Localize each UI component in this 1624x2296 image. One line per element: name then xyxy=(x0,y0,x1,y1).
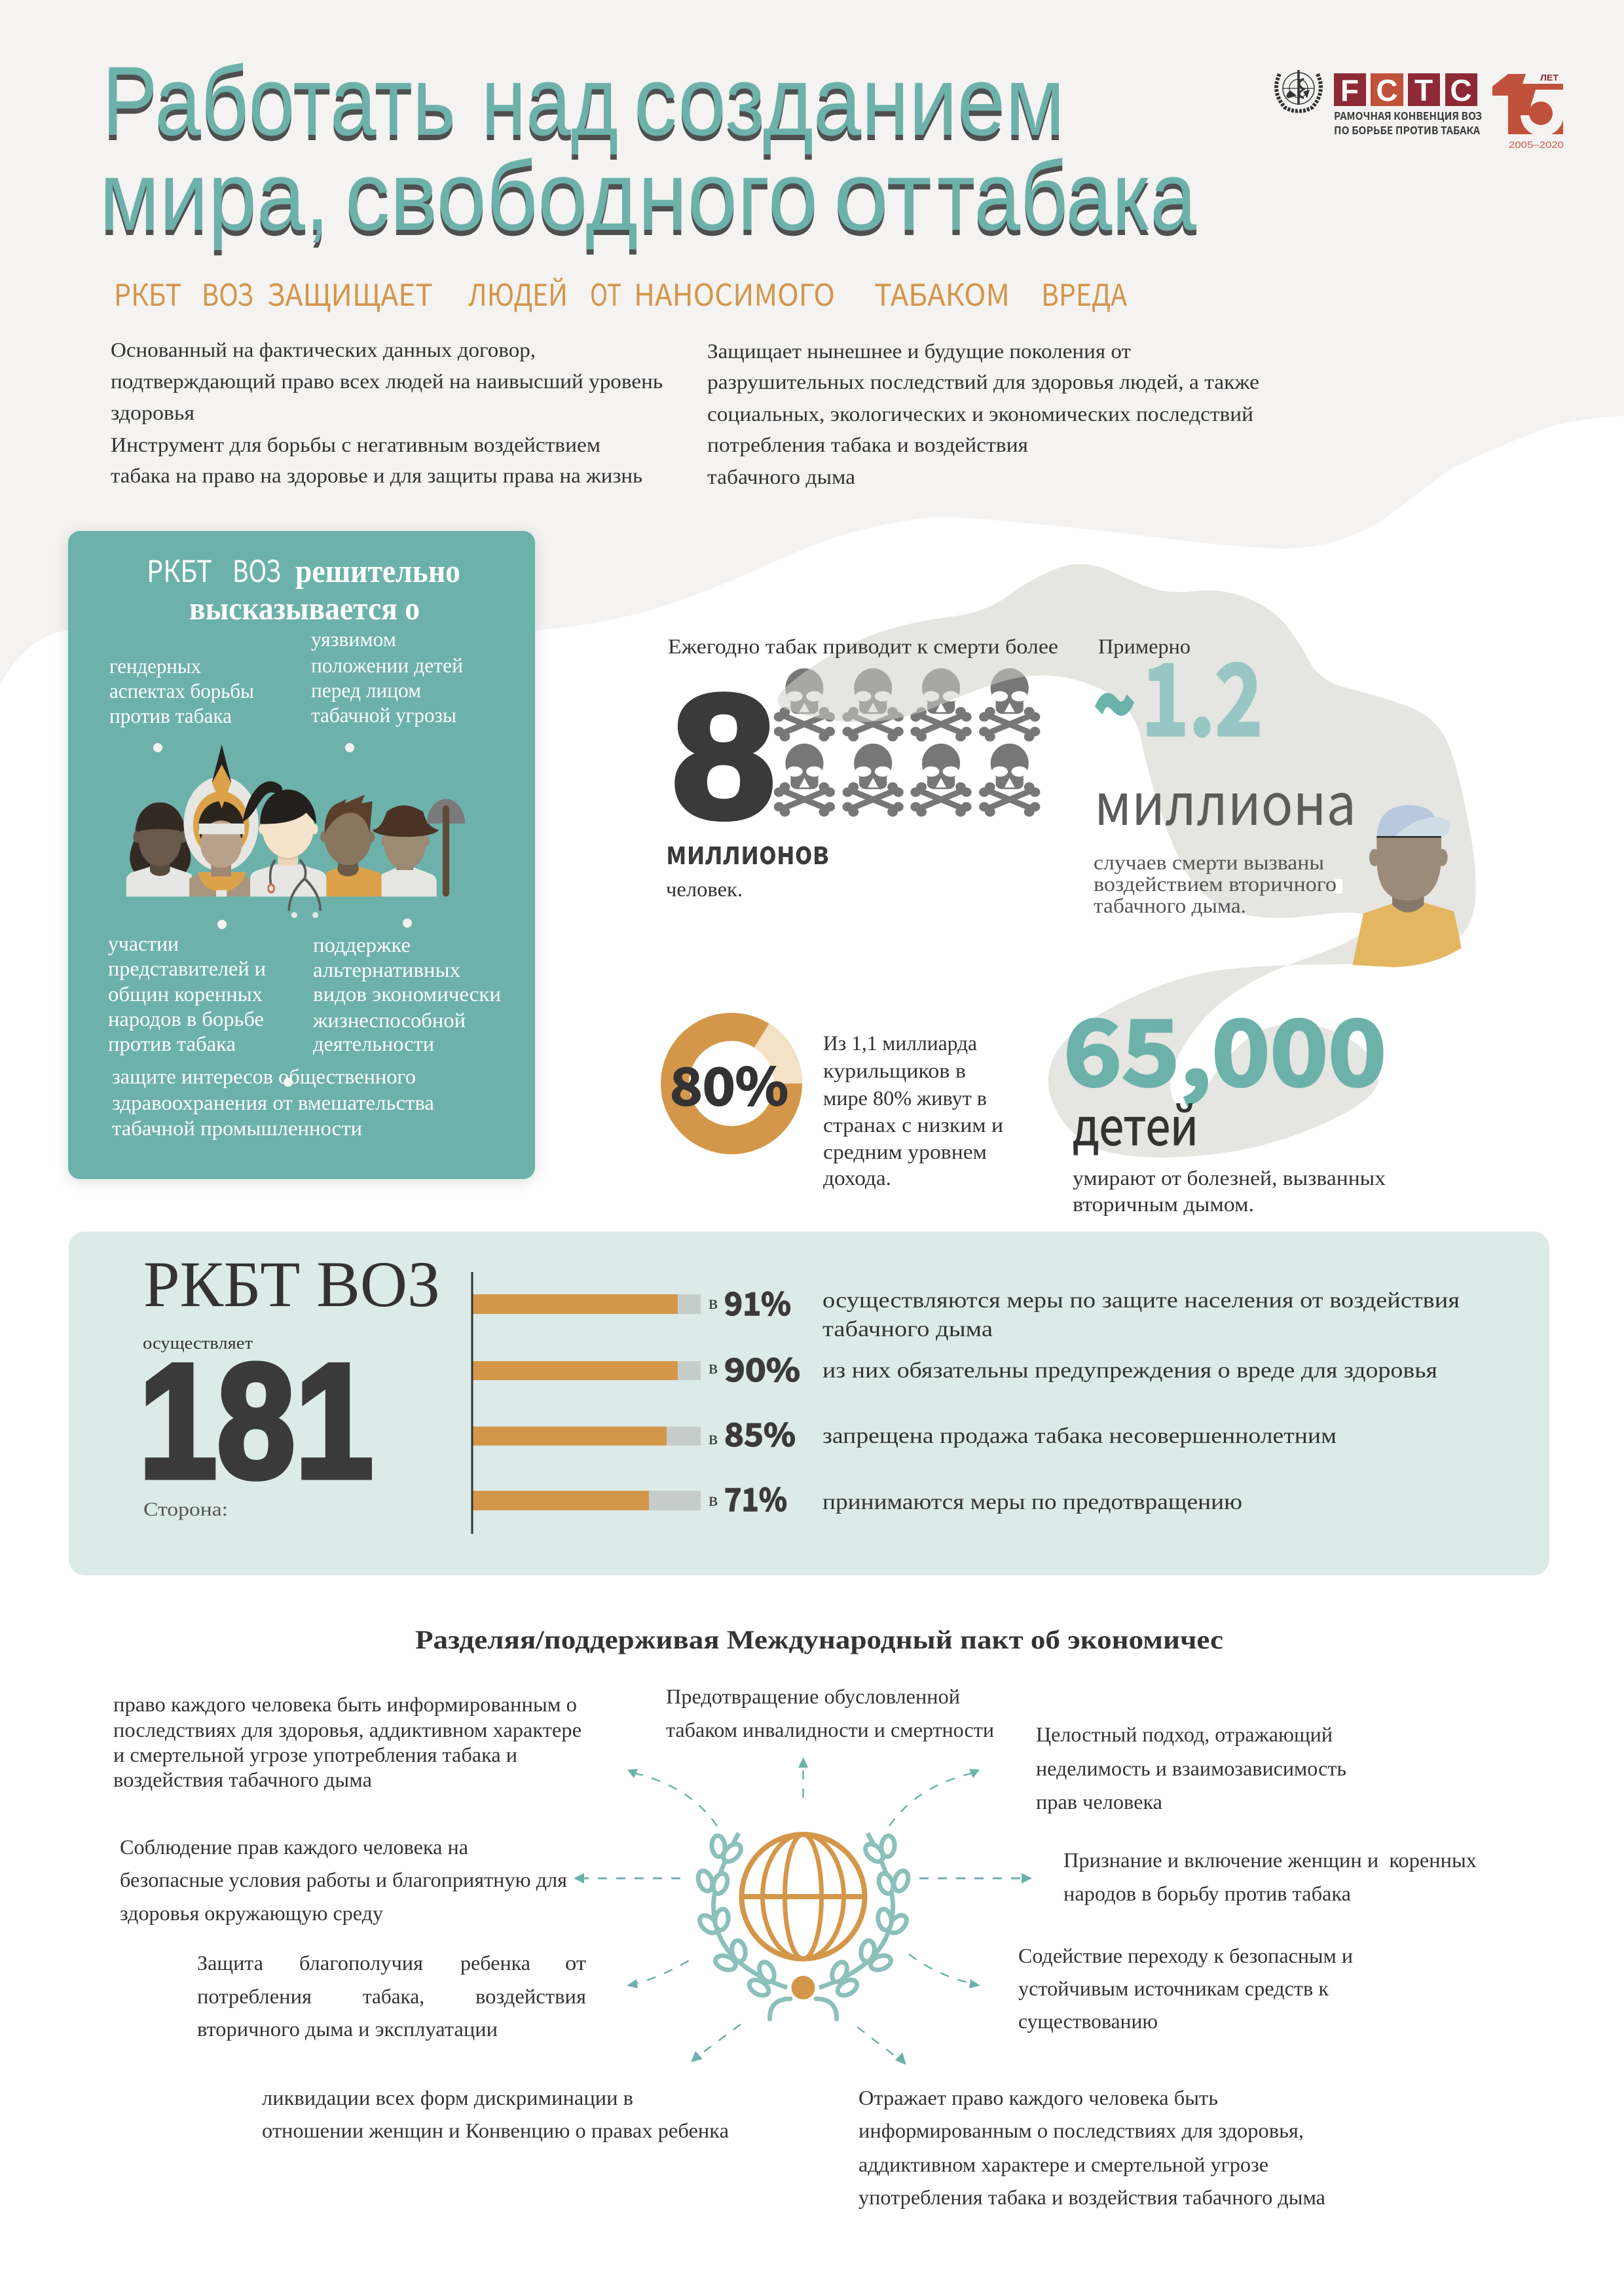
text: prevention: Предотвращение обусловленной xyxy=(666,1685,960,1708)
percent labels xyxy=(709,1279,800,1520)
percent labels: 90% xyxy=(724,1345,800,1391)
title: свободного xyxy=(345,141,818,251)
intro text: left column: Основанный на фактических данных договор, xyxy=(111,338,536,361)
stat: 65,000 children xyxy=(1063,981,1386,1216)
text: child welfare: вторичного дыма и эксплуатации xyxy=(197,2017,498,2041)
text: child welfare: табака, xyxy=(363,1984,424,2008)
intro text: right column: разрушительных последствий для здоровья людей, а также xyxy=(707,370,1259,393)
title xyxy=(100,46,1196,251)
text: alternative livelihoods: деятельности xyxy=(313,1032,434,1055)
text: indigenous participation: представителей и xyxy=(108,957,266,980)
text: safe working conditions: Соблюдение прав каждого человека на xyxy=(120,1835,468,1859)
stat: 8 million deaths: 8 xyxy=(672,658,775,854)
text: gender aspects: против табака xyxy=(109,704,232,727)
text: alternative livelihoods: альтернативных xyxy=(313,958,460,981)
text: child welfare xyxy=(197,1951,586,2041)
text: holistic approach: прав человека xyxy=(1036,1790,1162,1813)
title: над xyxy=(481,46,618,156)
globe xyxy=(741,1834,864,1959)
text: women and indigenous peoples xyxy=(1063,1848,1477,1905)
stat: 1.2 million second-hand smoke: случаев смерти вызваны xyxy=(1094,850,1324,874)
bar descriptions: принимаются меры по предотвращению xyxy=(822,1490,1242,1514)
intro text: left column: здоровья xyxy=(111,401,194,424)
panel: FCTC parties and implementation xyxy=(69,1231,1549,1575)
text: reflects right to information: Отражает право каждого человека быть xyxy=(858,2086,1218,2109)
text: holistic approach xyxy=(1036,1722,1346,1813)
doctor with stethoscope xyxy=(243,781,326,918)
text: holistic approach: неделимость и взаимозависимость xyxy=(1036,1757,1346,1780)
text: indigenous participation: участии xyxy=(108,932,179,955)
stat: 1.2 million second-hand smoke: миллиона xyxy=(1094,759,1356,842)
icon: WHO emblem xyxy=(1276,70,1321,111)
stat: 8 million deaths: миллионов xyxy=(666,828,829,873)
title: Работать xyxy=(102,46,456,156)
stat: 181 parties: 181 xyxy=(139,1330,373,1512)
text: indigenous participation: общин коренных xyxy=(108,982,263,1006)
icon: rows of skulls and crossbones xyxy=(774,668,1040,816)
text: right to be informed: право каждого человека быть информированным о xyxy=(113,1692,577,1716)
text: indigenous participation: против табака xyxy=(108,1032,236,1055)
FCTC letter boxes: T xyxy=(1414,73,1433,107)
stat: 1.2 million second-hand smoke: воздействием вторичного xyxy=(1094,872,1337,896)
intro text: right column xyxy=(707,339,1259,488)
bar descriptions xyxy=(822,1288,1460,1514)
subtitle: ЗАЩИЩАЕТ xyxy=(267,272,433,315)
text: indigenous participation: народов в борьбе xyxy=(108,1007,264,1030)
text: women and indigenous peoples: народов в борьбу против табака xyxy=(1063,1882,1351,1905)
intro text: left column xyxy=(111,338,663,487)
intro text: right column: потребления табака и воздействия xyxy=(707,433,1028,456)
anniversary number 15 xyxy=(1492,73,1568,151)
text: vulnerable children: перед лицом xyxy=(311,678,421,702)
text: reflects right to information: аддиктивном характере и смертельной угрозе xyxy=(858,2153,1268,2176)
stat: 65,000 children: умирают от болезней, вызванных xyxy=(1073,1166,1386,1190)
text: child welfare: Защита xyxy=(197,1951,263,1975)
text: reflects right to information: информированным о последствиях для здоровья, xyxy=(858,2119,1304,2142)
text: right to be informed: последствиях для здоровья, аддиктивном характере xyxy=(113,1718,581,1741)
man with spiky hair xyxy=(320,795,382,897)
subtitle: ВРЕДА xyxy=(1041,272,1127,315)
shovel xyxy=(427,799,465,897)
text: smokers in low and middle income countries: средним уровнем xyxy=(823,1140,987,1163)
FCTC letter boxes: F xyxy=(1340,73,1359,107)
text: eliminating discrimination xyxy=(262,2086,729,2142)
text: sustainable livelihoods: Содействие переходу к безопасным и xyxy=(1018,1944,1353,1967)
FCTC letter boxes: C xyxy=(1450,73,1472,107)
text: gender aspects: гендерных xyxy=(109,654,201,678)
logo caption: ПО БОРЬБЕ ПРОТИВ ТАБАКА xyxy=(1334,122,1481,137)
text: alternative livelihoods: поддержке xyxy=(313,933,411,957)
text: child welfare: ребенка xyxy=(460,1951,530,1975)
text: child welfare: благополучия xyxy=(299,1951,423,1975)
stat: 8 million deaths: Ежегодно табак приводит к смерти более xyxy=(668,634,1058,658)
subtitle: ОТ xyxy=(590,272,621,315)
panel heading xyxy=(147,548,460,627)
stat: 181 parties: Сторона: xyxy=(143,1499,228,1520)
intro text: right column: Защищает нынешнее и будущие поколения от xyxy=(707,339,1131,363)
stat: 65,000 children: детей xyxy=(1073,1087,1198,1160)
percent labels: в xyxy=(709,1427,718,1449)
bar descriptions: из них обязательны предупреждения о вреде для здоровья xyxy=(822,1358,1437,1383)
text: vulnerable children xyxy=(311,627,463,727)
stat: 1.2 million second-hand smoke: ~ xyxy=(1094,628,1135,770)
indigenous person with feather headdress xyxy=(184,744,259,897)
text: women and indigenous peoples: Признание и включение женщин и коренных xyxy=(1063,1848,1477,1872)
percent labels: 91% xyxy=(724,1279,791,1324)
text: alternative livelihoods: видов экономически xyxy=(313,982,501,1006)
percent labels: 85% xyxy=(724,1410,796,1455)
anniversary number 15: 2005–2020 xyxy=(1509,139,1564,151)
text: smokers in low and middle income countries: Из 1,1 миллиарда xyxy=(823,1031,977,1055)
text: smokers in low and middle income countries: мире 80% живут в xyxy=(823,1086,987,1110)
stat: 181 parties: осуществляет xyxy=(143,1334,253,1353)
percent labels: в xyxy=(709,1292,718,1313)
chart: 80% donut xyxy=(670,1027,788,1140)
FCTC letter boxes xyxy=(1334,73,1477,107)
text: public health protection: табачной промышленности xyxy=(112,1116,362,1140)
text: public health protection: защите интересов общественного xyxy=(112,1065,416,1088)
heading: FCTC WHO: РКБТ ВОЗ xyxy=(143,1248,440,1321)
text: smokers in low and middle income countries: курильщиков в xyxy=(823,1059,966,1082)
text: reflects right to information xyxy=(858,2086,1325,2209)
logo caption: РАМОЧНАЯ КОНВЕНЦИЯ ВОЗ xyxy=(1334,107,1482,123)
bullet dots xyxy=(153,743,412,1087)
subtitle: ВОЗ xyxy=(202,272,253,315)
text: public health protection xyxy=(112,1065,434,1140)
text: right to be informed xyxy=(113,1692,581,1791)
subtitle xyxy=(114,272,1127,315)
stat: 65,000 children: 65,000 xyxy=(1063,981,1386,1112)
chart: 80% donut: 80% xyxy=(670,1047,788,1120)
stat: 8 million deaths xyxy=(666,634,1058,901)
text: reflects right to information: употребления табака и воздействия табачного дыма xyxy=(858,2185,1325,2209)
intro text: left column: Инструмент для борьбы с негативным воздействием xyxy=(111,433,600,456)
text: child welfare: воздействия xyxy=(475,1984,586,2008)
arrows: dashed teal rays xyxy=(574,1757,1032,2065)
text: gender aspects xyxy=(109,654,254,727)
text: alternative livelihoods: жизнеспособной xyxy=(312,1008,466,1032)
bar descriptions: осуществляются меры по защите населения от воздействия xyxy=(822,1288,1460,1313)
intro text: left column: подтверждающий право всех людей на наивысший уровень xyxy=(111,369,663,393)
percent labels: 71% xyxy=(724,1474,787,1520)
bar descriptions: табачного дыма xyxy=(822,1317,993,1341)
text: right to be informed: и смертельной угрозе употребления табака и xyxy=(113,1743,517,1766)
title: мира, xyxy=(100,141,329,251)
stat: 1.2 million second-hand smoke: Примерно xyxy=(1098,634,1190,658)
subtitle: НАНОСИМОГО xyxy=(634,272,835,315)
panel heading: ВОЗ xyxy=(232,548,281,591)
subtitle: ТАБАКОМ xyxy=(874,272,1010,315)
icon: man in cap xyxy=(1352,805,1462,967)
text: safe working conditions xyxy=(120,1835,567,1925)
text: smokers in low and middle income countries xyxy=(823,1031,1003,1190)
smoke shape xyxy=(778,564,1476,1157)
text: child welfare: от xyxy=(565,1951,586,1975)
stat: 65,000 children: вторичным дымом. xyxy=(1073,1192,1254,1216)
intro text: right column: табачного дыма xyxy=(707,465,855,488)
FCTC letter boxes: C xyxy=(1376,73,1398,107)
stat: 1.2 million second-hand smoke: 1.2 xyxy=(1141,622,1263,764)
intro text: right column: социальных, экологических и экономических последствий xyxy=(707,402,1253,426)
title: от xyxy=(834,141,932,251)
subtitle: ЛЮДЕЙ xyxy=(468,272,568,315)
panel heading: РКБТ xyxy=(147,548,212,591)
title: созданием xyxy=(634,46,1065,156)
woman xyxy=(126,803,192,897)
heading: international covenant: Разделяя/поддерживая Международный пакт об экономичес xyxy=(415,1625,1223,1654)
panel heading: высказывается о xyxy=(189,590,420,627)
icon: globe in laurel wreath xyxy=(695,1833,911,2019)
text: vulnerable children: табачной угрозы xyxy=(311,703,456,727)
man in hat xyxy=(372,805,439,897)
bar descriptions: запрещена продажа табака несовершеннолетним xyxy=(822,1424,1337,1448)
icon: group of people xyxy=(126,744,465,918)
panel heading: решительно xyxy=(295,553,460,589)
anniversary number 15: ЛЕТ xyxy=(1540,73,1559,82)
text: smokers in low and middle income countries: дохода. xyxy=(823,1166,891,1190)
text: public health protection: здравоохранения от вмешательства xyxy=(112,1091,434,1114)
chart: implementation bars xyxy=(471,1272,701,1534)
text: vulnerable children: положении детей xyxy=(311,653,463,677)
panel: FCTC speaks out xyxy=(68,531,535,1179)
text: sustainable livelihoods: существованию xyxy=(1018,2009,1158,2033)
logo caption xyxy=(1334,107,1482,137)
text: holistic approach: Целостный подход, отражающий xyxy=(1036,1722,1333,1746)
text: indigenous participation xyxy=(108,932,266,1055)
text: sustainable livelihoods xyxy=(1018,1944,1353,2033)
percent labels: в xyxy=(709,1357,718,1378)
logo: WHO and FCTC 15 years xyxy=(1276,70,1568,151)
laurel wreath xyxy=(695,1833,911,2019)
percent labels: в xyxy=(709,1489,718,1510)
text: gender aspects: аспектах борьбы xyxy=(109,679,254,702)
text: alternative livelihoods xyxy=(312,933,501,1055)
text: sustainable livelihoods: устойчивым источникам средств к xyxy=(1018,1977,1329,2000)
text: eliminating discrimination: ликвидации всех форм дискриминации в xyxy=(262,2086,633,2109)
stat: 1.2 million second-hand smoke xyxy=(1094,622,1356,917)
text: eliminating discrimination: отношении женщин и Конвенцию о правах ребенка xyxy=(262,2119,729,2142)
text: smokers in low and middle income countries: странах с низким и xyxy=(823,1113,1003,1137)
intro text: left column: табака на право на здоровье и для защиты права на жизнь xyxy=(111,464,642,487)
orange dot xyxy=(791,1976,815,1999)
stat: 8 million deaths: человек. xyxy=(666,877,743,901)
text: safe working conditions: безопасные условия работы и благоприятную для xyxy=(120,1868,567,1891)
text: right to be informed: воздействия табачного дыма xyxy=(113,1768,372,1791)
stat: 1.2 million second-hand smoke: табачного дыма. xyxy=(1094,894,1246,917)
text: vulnerable children: уязвимом xyxy=(311,627,396,651)
text: prevention xyxy=(666,1685,994,1741)
text: safe working conditions: здоровья окружающую среду xyxy=(120,1901,383,1925)
title: табака xyxy=(937,141,1196,251)
text: prevention: табаком инвалидности и смертности xyxy=(666,1718,994,1741)
text: child welfare: потребления xyxy=(197,1984,312,2008)
subtitle: РКБТ xyxy=(114,272,181,315)
